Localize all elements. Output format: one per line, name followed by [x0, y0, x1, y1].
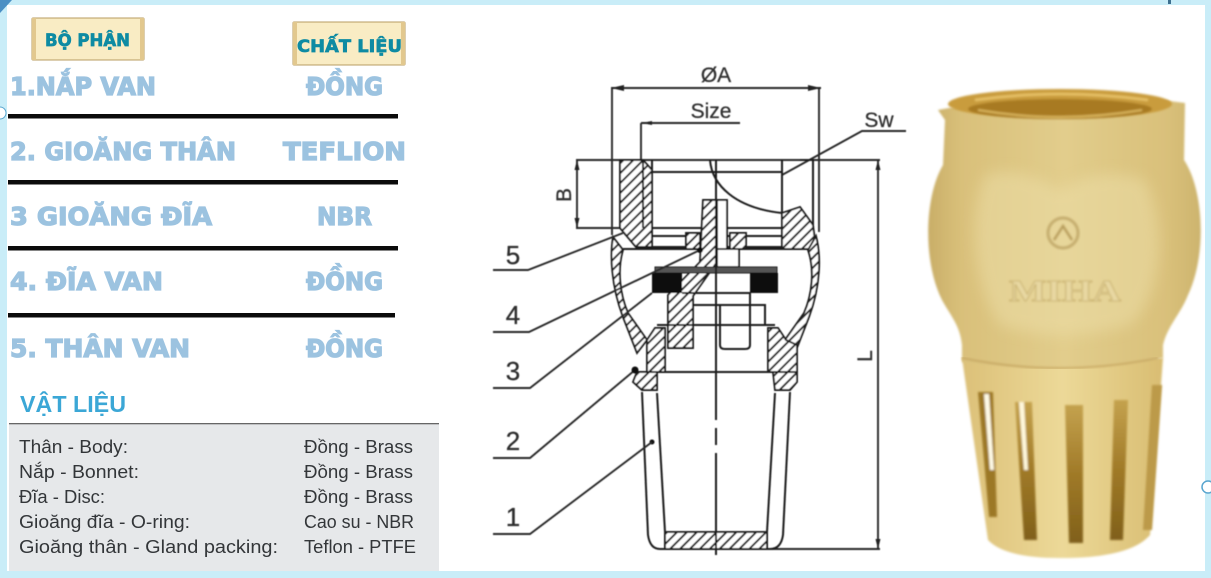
body: [928, 95, 1201, 368]
panel: materials list: Đồng - Brass: [304, 487, 413, 507]
panel: materials list: Gioăng thân - Gland packing:: [19, 537, 278, 557]
panel: materials list: [9, 423, 439, 571]
row 3: gioăng đĩa: NBR: [317, 202, 372, 231]
row 4: đĩa van: [10, 263, 383, 296]
embossed brand: MIHA: [1009, 273, 1122, 308]
row 2: gioăng thân: [10, 136, 406, 166]
callout 1: [493, 442, 652, 534]
row 5: thân van: ĐỒNG: [306, 330, 383, 363]
callout 4: [493, 247, 703, 332]
row 2: gioăng thân: TEFLION: [283, 137, 406, 166]
row 3: gioăng đĩa: [10, 201, 372, 231]
panel: materials list: Đồng - Brass: [304, 462, 413, 482]
row 2: gioăng thân: 2. GIOĂNG THÂN: [10, 136, 236, 166]
panel: materials list: Thân - Body:: [19, 437, 128, 457]
center line: [715, 160, 717, 555]
dimension: L: L: [854, 350, 877, 362]
strainer basket: [962, 358, 1163, 558]
row 1: nắp van: ĐỒNG: [306, 68, 383, 101]
callout 2: [493, 366, 638, 458]
strainer: [642, 392, 790, 549]
dimension: Sw: Sw: [864, 109, 894, 132]
dimension: Size: [641, 100, 740, 160]
product photo: brass foot valve: [928, 89, 1201, 558]
strainer slots: [978, 385, 1162, 543]
panel: materials list: Teflon - PTFE: [304, 537, 416, 557]
row 4: đĩa van: 4. ĐĨA VAN: [10, 267, 163, 296]
panel: materials list: Nắp - Bonnet:: [19, 461, 139, 482]
parts table: [8, 68, 406, 363]
row 1: nắp van: 1.NẮP VAN: [10, 68, 156, 101]
panel: materials list: Gioăng đĩa - O-ring:: [19, 512, 190, 532]
row 3: gioăng đĩa: 3 GIOĂNG ĐĨA: [10, 201, 213, 231]
scroll heading: CHẤT LIỆU: [293, 22, 405, 65]
threaded opening: [948, 89, 1172, 119]
lower joint: [633, 325, 797, 390]
dimension: Sw: [782, 109, 906, 175]
highlight on shoulder: [974, 172, 1159, 335]
panel: materials list: Đĩa - Disc:: [19, 487, 105, 507]
dimension: ØA: [611, 64, 821, 235]
callout 1: 1: [506, 502, 520, 532]
row 4: đĩa van: ĐỒNG: [306, 263, 383, 296]
callout 4: 4: [506, 300, 520, 330]
callout 5: 5: [506, 240, 520, 270]
scroll heading: CHẤT LIỆU: CHẤT LIỆU: [297, 33, 402, 57]
disc and stem: [652, 200, 778, 349]
row 5: thân van: [10, 330, 383, 363]
technical cross-section drawing: [493, 64, 906, 555]
panel: materials list: Cao su - NBR: [304, 512, 414, 532]
row 5: thân van: 5. THÂN VAN: [10, 334, 190, 363]
heading: VẬT LIỆU: VẬT LIỆU: [20, 390, 126, 417]
dimension: ØA: ØA: [701, 64, 731, 87]
dimension: Size: Size: [691, 100, 731, 123]
callout 3: [493, 293, 652, 388]
gasket: black disc seal: [652, 273, 778, 293]
logo mark: [1048, 218, 1078, 248]
valve body upper: [612, 160, 819, 353]
dimension: L: [660, 160, 880, 549]
callout 5: [493, 233, 623, 270]
collar groove: [962, 358, 1158, 368]
scroll heading: BỘ PHẬN: [32, 18, 144, 60]
dimension: B: [553, 160, 880, 228]
callout 2: 2: [506, 426, 520, 456]
panel: materials list: Đồng - Brass: [304, 437, 413, 457]
dimension: B: B: [553, 188, 576, 202]
callout 3: 3: [506, 356, 520, 386]
row 1: nắp van: [10, 68, 383, 101]
scroll heading: BỘ PHẬN: BỘ PHẬN: [45, 29, 130, 51]
